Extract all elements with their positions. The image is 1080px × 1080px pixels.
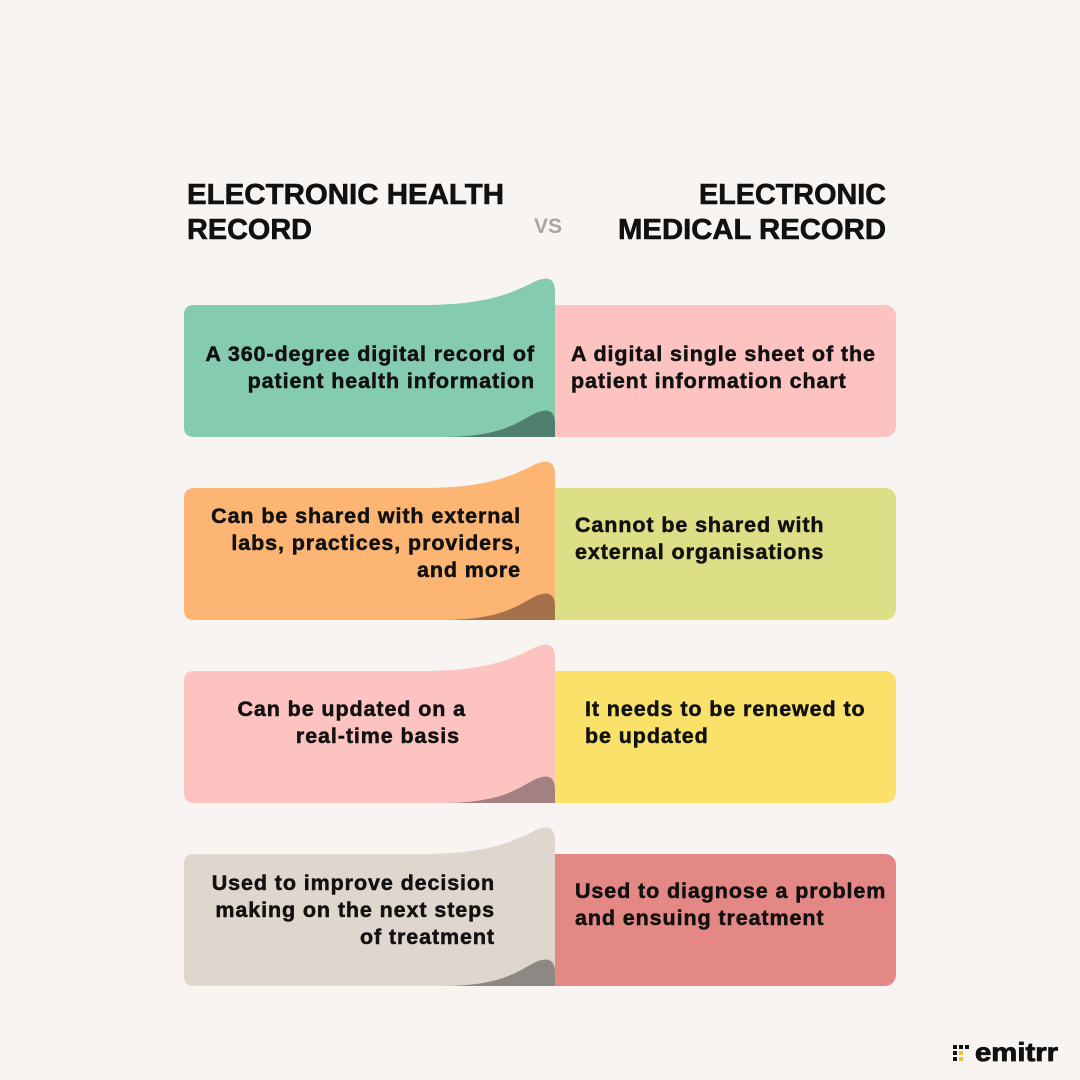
title: right heading: ELECTRONIC bbox=[699, 179, 886, 211]
text: EMR row 3: It needs to be renewed to bbox=[585, 697, 866, 721]
text: EMR row 4 bbox=[575, 879, 886, 930]
text: EMR row 4: and ensuing treatment bbox=[575, 906, 824, 930]
title: left heading: RECORD bbox=[187, 214, 312, 246]
curl shadow row 4 bbox=[440, 960, 555, 986]
text: EMR row 3: be updated bbox=[585, 724, 709, 748]
panel: EHR row 2 bbox=[184, 462, 555, 620]
text: EMR row 2: external organisations bbox=[575, 540, 824, 564]
text: EMR row 2 bbox=[575, 513, 824, 564]
text: EMR row 1 bbox=[571, 342, 876, 393]
title: right heading: MEDICAL RECORD bbox=[618, 214, 886, 246]
panel: EMR row 1 bbox=[540, 305, 896, 437]
text: EHR row 4: Used to improve decision bbox=[212, 871, 495, 895]
text: EMR row 1: patient information chart bbox=[571, 369, 847, 393]
title: left heading bbox=[187, 179, 504, 246]
text: EHR row 3: real-time basis bbox=[296, 724, 460, 748]
text: EHR row 3: Can be updated on a bbox=[237, 697, 466, 721]
panel: EHR row 1 bbox=[184, 279, 555, 437]
text: EMR row 3 bbox=[585, 697, 866, 748]
row 3 bbox=[184, 645, 896, 803]
text: EHR row 4 bbox=[212, 871, 495, 949]
panel: EMR row 4 bbox=[540, 854, 896, 986]
text: EHR row 1: A 360-degree digital record of bbox=[205, 342, 535, 366]
title: right heading bbox=[618, 179, 886, 246]
text: EHR row 2: Can be shared with external bbox=[211, 504, 521, 528]
row 1 bbox=[184, 279, 896, 437]
text: EHR row 1 bbox=[205, 342, 535, 393]
vs label: VS bbox=[534, 215, 562, 238]
logo: emitrr: emitrr bbox=[975, 1037, 1058, 1067]
text: EHR row 2 bbox=[211, 504, 521, 582]
panel: EHR row 4 bbox=[184, 828, 555, 986]
row 2 bbox=[184, 462, 896, 620]
text: EHR row 4: of treatment bbox=[360, 925, 495, 949]
title: left heading: ELECTRONIC HEALTH bbox=[187, 179, 504, 211]
text: EHR row 2: labs, practices, providers, bbox=[231, 531, 521, 555]
text: EHR row 2: and more bbox=[417, 558, 521, 582]
panel: EHR row 3 bbox=[184, 645, 555, 803]
curl shadow row 1 bbox=[440, 411, 555, 437]
text: EHR row 1: patient health information bbox=[248, 369, 535, 393]
curl shadow row 3 bbox=[440, 777, 555, 803]
text: EMR row 4: Used to diagnose a problem bbox=[575, 879, 886, 903]
curl shadow row 2 bbox=[440, 594, 555, 620]
panel: EMR row 2 bbox=[540, 488, 896, 620]
text: EHR row 4: making on the next steps bbox=[215, 898, 495, 922]
text: EMR row 2: Cannot be shared with bbox=[575, 513, 824, 537]
row 4 bbox=[184, 828, 896, 986]
text: EHR row 3 bbox=[237, 697, 466, 748]
text: EMR row 1: A digital single sheet of the bbox=[571, 342, 876, 366]
icon: dot grid bbox=[953, 1045, 969, 1061]
panel: EMR row 3 bbox=[540, 671, 896, 803]
